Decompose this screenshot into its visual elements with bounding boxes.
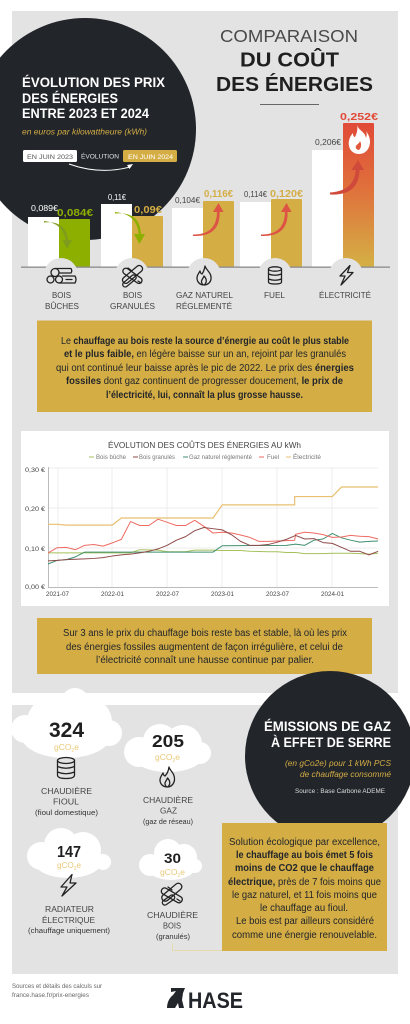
- label: chaudière fioul: FIOUL: [53, 798, 80, 806]
- cloud: fioul 324: [11, 688, 122, 758]
- connector line: [172, 943, 222, 950]
- arrow: fuel up: [261, 203, 292, 236]
- arrow: legend evolution: [69, 164, 130, 170]
- heading: price evolution: ÉVOLUTION DES PRIX: [22, 75, 165, 90]
- legend: June 2024: [123, 150, 177, 162]
- category labels: [45, 291, 371, 311]
- bar chart: energy prices 2023 vs 2024: [21, 112, 390, 292]
- callout: summary of prices: fossiles dont gaz continuent de progresser doucement, le prix de: [66, 376, 344, 387]
- bar chart: energy prices 2023 vs 2024: 0,120€: [270, 189, 303, 200]
- legend: June 2023: [23, 150, 77, 162]
- callout: wood emissions: Solution écologique par excellence,: [229, 837, 380, 848]
- category labels: BOIS: [52, 291, 71, 300]
- bars: gaz naturel: [172, 201, 234, 267]
- line chart: energy costs per kWh: [21, 431, 389, 606]
- title: DU COÛT: [240, 48, 339, 72]
- chart legend: Bois granulés: [139, 454, 175, 461]
- label: chaudière bois: BOIS: [163, 922, 181, 930]
- arrow: gaz up: [193, 203, 224, 236]
- chart legend: Fuel: [267, 454, 279, 461]
- y axis labels: 0,00 €: [25, 584, 45, 591]
- label: radiateur électrique: [28, 905, 110, 935]
- heading: price evolution: ENTRE 2023 ET 2024: [22, 106, 149, 121]
- unit: 2: [71, 748, 74, 754]
- callout: wood emissions: le chauffage au bois émet 5 fois: [236, 850, 373, 861]
- x axis labels: 2024-01: [321, 592, 345, 598]
- icon: fuel barrel: [268, 267, 282, 284]
- footer: sources: [12, 984, 102, 999]
- y axis labels: 0,30 €: [25, 467, 45, 474]
- label: chaudière bois: [147, 911, 198, 941]
- line: électricité: [48, 487, 378, 525]
- footer: sources: Sources et détails des calculs sur: [12, 984, 102, 990]
- arrow: bois granulés down: [115, 212, 145, 244]
- bar chart: energy prices 2023 vs 2024: 0,084€: [57, 208, 94, 219]
- line: gaz naturel: [48, 533, 378, 564]
- cloud: gaz 205: [124, 724, 211, 772]
- callout: wood emissions: le chauffage au fioul.: [260, 903, 348, 914]
- icon: wood pellets: [160, 882, 183, 906]
- value: 147: 147: [57, 844, 81, 861]
- y axis labels: 0,10 €: [25, 546, 45, 553]
- legend: June 2023: EN JUIN 2023: [27, 154, 73, 161]
- legend: June 2024: EN JUIN 2024: [128, 154, 173, 161]
- logo: Hase: HASE: [188, 988, 243, 1013]
- unit: gCO: [160, 867, 177, 877]
- category labels: BOIS: [123, 291, 142, 300]
- category labels: GRANULÉS: [110, 302, 155, 311]
- label: chaudière bois: (granulés): [156, 934, 190, 941]
- icon: flame on electricity bar: [349, 124, 370, 154]
- panel: cost comparison background: [12, 11, 398, 693]
- cloud: bois 30: [139, 839, 202, 880]
- icon backgrounds: [44, 258, 363, 292]
- value labels: 0,206€: [315, 138, 342, 147]
- callout: wood emissions: [222, 823, 387, 951]
- label: chaudière gaz: [143, 796, 193, 826]
- chart legend: [89, 452, 322, 461]
- callout: wood emissions: électrique, près de 7 fois moins que: [228, 877, 382, 888]
- icon: gas flame: [160, 767, 175, 787]
- dark circle: price evolution heading: [0, 18, 196, 240]
- value: 324: 324: [49, 719, 84, 742]
- subtitle: emissions unit: [285, 759, 392, 779]
- bars: électricité: [312, 123, 374, 267]
- value: 30: 30: [164, 850, 181, 866]
- unit: e: [175, 752, 180, 762]
- label: chaudière bois: CHAUDIÈRE: [147, 911, 198, 920]
- line: bois bûche: [48, 550, 378, 554]
- callout: three-year summary: des énergies fossiles augmentent de façon irrégulière, et celui de: [66, 642, 344, 653]
- category labels: RÉGLEMENTÉ: [176, 302, 232, 311]
- icon: electricity bolt: [340, 266, 353, 285]
- line: fuel: [48, 519, 378, 553]
- icon: wood pellets: [121, 264, 144, 288]
- bar chart: energy prices 2023 vs 2024: 0,116€: [204, 189, 233, 200]
- callout: summary of prices: qui ont continué leur baisse après le pic de 2022. Le prix des énergies: [56, 363, 355, 374]
- chart legend: Électricité: [293, 452, 322, 461]
- bar chart: energy prices 2023 vs 2024: 0,252€: [340, 112, 379, 123]
- x axis labels: 2023-01: [211, 592, 235, 598]
- label: radiateur électrique: ÉLECTRIQUE: [42, 916, 95, 925]
- icon: logs: [47, 268, 76, 283]
- callout: wood emissions: moins de CO2 que le chauffage: [235, 863, 375, 874]
- line: bois granulés: [48, 527, 378, 561]
- value labels: 0,11€: [108, 193, 126, 202]
- callout: summary of prices: et le plus faible, en légère baisse sur un an, rejoint par les granulés: [64, 349, 346, 360]
- category labels: FUEL: [264, 291, 286, 300]
- dark circle: emissions heading: [245, 671, 410, 841]
- chart legend: Gaz naturel réglementé: [189, 454, 252, 461]
- heading: emissions: [264, 719, 391, 750]
- category labels: BÛCHES: [45, 302, 79, 311]
- callout: wood emissions: Le bois est par ailleurs considéré: [236, 916, 375, 927]
- icon: radiator bolt: [61, 874, 76, 896]
- bars: bois bûches: [28, 217, 90, 267]
- callout: summary of prices: Le chauffage au bois reste la source d’énergie au coût le plus stable: [61, 336, 349, 347]
- unit: gCO: [57, 860, 74, 870]
- heading: price evolution: [22, 75, 165, 121]
- unit: 2: [177, 873, 180, 879]
- title: DES ÉNERGIES: [216, 73, 373, 96]
- label: chaudière fioul: (fioul domestique): [35, 810, 98, 817]
- chart legend: Bois bûche: [96, 454, 126, 461]
- arrow: électricité up: [330, 160, 364, 195]
- label: radiateur électrique: RADIATEUR: [45, 905, 94, 914]
- y axis labels: 0,20 €: [25, 506, 45, 513]
- x axis labels: 2022-01: [101, 592, 125, 598]
- icon: fioul barrel: [58, 758, 74, 778]
- x axis labels: 2022-07: [156, 592, 180, 598]
- subtitle: units: en euros par kilowattheure (kWh): [22, 128, 147, 136]
- bars: fuel: [240, 199, 302, 267]
- callout: wood emissions: le gaz naturel, et 11 fois moins que: [232, 890, 378, 901]
- logo: Hase: [167, 988, 243, 1013]
- icon: gas flame: [197, 266, 211, 285]
- value labels: 0,114€: [244, 190, 268, 199]
- unit: gCO: [54, 742, 71, 752]
- heading: price evolution: DES ÉNERGIES: [22, 91, 118, 106]
- callout: three-year summary: Sur 3 ans le prix du chauffage bois reste bas et stable, là où les prix: [63, 628, 347, 639]
- heading: emissions: À EFFET DE SERRE: [271, 735, 391, 750]
- value labels: [31, 138, 342, 213]
- callout: three-year summary: [37, 618, 372, 674]
- source: Source : Base Carbone ADEME: [295, 788, 386, 795]
- y axis labels: [25, 467, 45, 591]
- label: chaudière gaz: CHAUDIÈRE: [143, 796, 193, 805]
- callout: three-year summary: l’électricité connaît une hausse continue par palier.: [96, 655, 314, 666]
- bar chart: energy prices 2023 vs 2024: 0,09€: [134, 205, 162, 216]
- unit: gCO: [155, 752, 172, 762]
- unit: e: [74, 742, 79, 752]
- label: chaudière gaz: GAZ: [160, 806, 177, 816]
- unit: 2: [172, 758, 175, 764]
- x axis labels: 2023-07: [266, 592, 290, 598]
- chart title: ÉVOLUTION DES COÛTS DES ÉNERGIES AU kWh: [108, 441, 301, 450]
- x axis labels: [46, 592, 345, 598]
- label: chaudière gaz: (gaz de réseau): [143, 819, 193, 826]
- title: [216, 26, 373, 105]
- value labels: 0,089€: [31, 204, 59, 213]
- value labels: 0,104€: [175, 196, 201, 205]
- legend: evolution: ÉVOLUTION: [81, 152, 119, 160]
- unit: e: [180, 867, 185, 877]
- panel: emissions background: [12, 705, 398, 974]
- data lines: [48, 487, 378, 564]
- heading: emissions: ÉMISSIONS DE GAZ: [264, 719, 391, 734]
- subtitle: emissions unit: (en gCo2e) pour 1 kWh PCS: [285, 759, 392, 768]
- label: radiateur électrique: (chauffage uniquement): [28, 928, 110, 935]
- bars: bois granulés: [101, 204, 163, 267]
- category labels: ÉLECTRICITÉ: [319, 291, 371, 300]
- axis: [21, 266, 390, 268]
- gridlines: [48, 468, 378, 587]
- label: chaudière fioul: CHAUDIÈRE: [41, 787, 92, 796]
- x axis labels: 2021-07: [46, 592, 70, 598]
- callout: summary of prices: [37, 320, 372, 412]
- category labels: GAZ NATUREL: [176, 291, 234, 300]
- unit: e: [76, 860, 81, 870]
- title: COMPARAISON: [220, 26, 358, 46]
- subtitle: emissions unit: de chauffage consommé: [300, 770, 392, 779]
- footer: sources: france.hase.fr/prix-energies: [12, 993, 89, 999]
- arrow: bois bûches down: [44, 221, 72, 249]
- cloud: radiateur 147: [27, 828, 111, 878]
- unit: 2: [74, 866, 77, 872]
- value: 205: 205: [152, 731, 184, 751]
- label: chaudière fioul: [35, 787, 98, 817]
- callout: wood emissions: comme une énergie renouvelable.: [232, 930, 377, 941]
- callout: summary of prices: l’électricité, lui, connaît la plus grosse hausse.: [106, 390, 303, 401]
